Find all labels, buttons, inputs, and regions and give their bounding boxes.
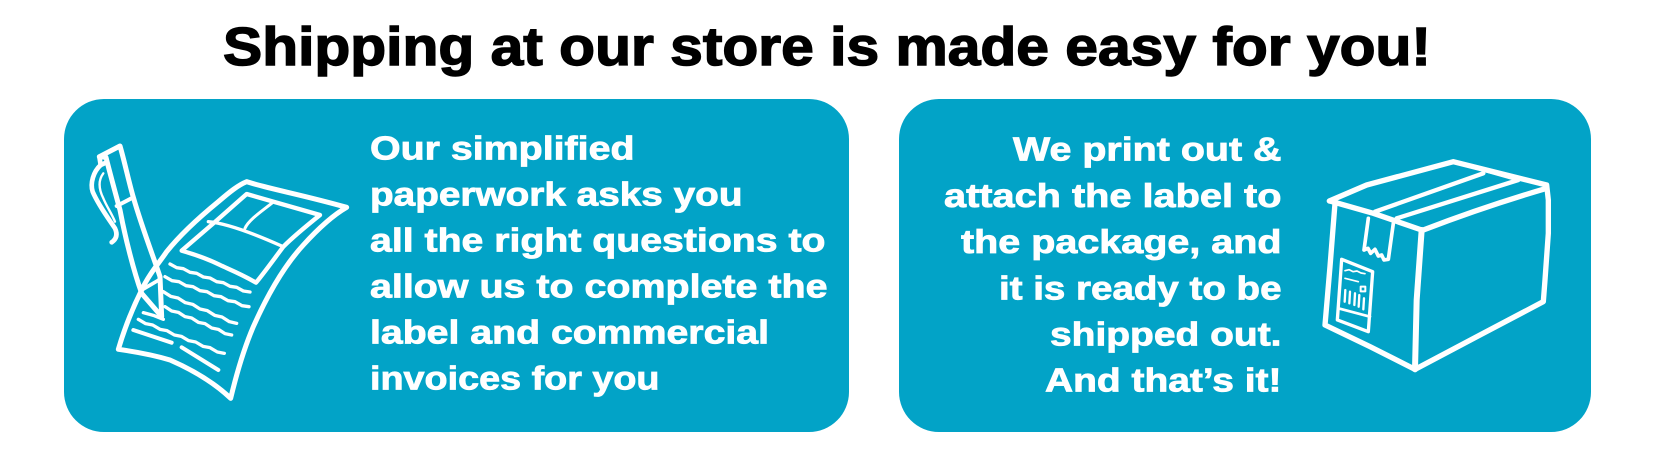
text block: package: shipped out.	[1050, 315, 1282, 352]
panel: paperwork	[64, 99, 849, 432]
icon: pen and paper	[92, 146, 347, 398]
text block: paperwork: paperwork asks you	[370, 176, 742, 212]
text block: paperwork	[370, 130, 828, 396]
panel background: package	[899, 99, 1591, 432]
icon: package box	[1325, 162, 1548, 369]
text block: package: We print out &	[1013, 131, 1282, 168]
text block: package: it is ready to be	[999, 269, 1282, 306]
text block: package: And that’s it!	[1045, 362, 1282, 399]
text block: paperwork: all the right questions to	[370, 222, 826, 258]
text block: paperwork: allow us to complete the	[370, 268, 828, 304]
title: Shipping at our store is made easy for you!	[223, 17, 1431, 77]
panel background: paperwork	[64, 99, 849, 432]
text block: package: the package, and	[961, 223, 1282, 260]
text block: paperwork: label and commercial	[370, 314, 769, 350]
text block: package	[944, 131, 1282, 399]
text block: paperwork: invoices for you	[370, 360, 660, 396]
text block: package: attach the label to	[944, 177, 1282, 214]
text block: paperwork: Our simplified	[370, 130, 634, 166]
panel: package	[899, 99, 1591, 432]
